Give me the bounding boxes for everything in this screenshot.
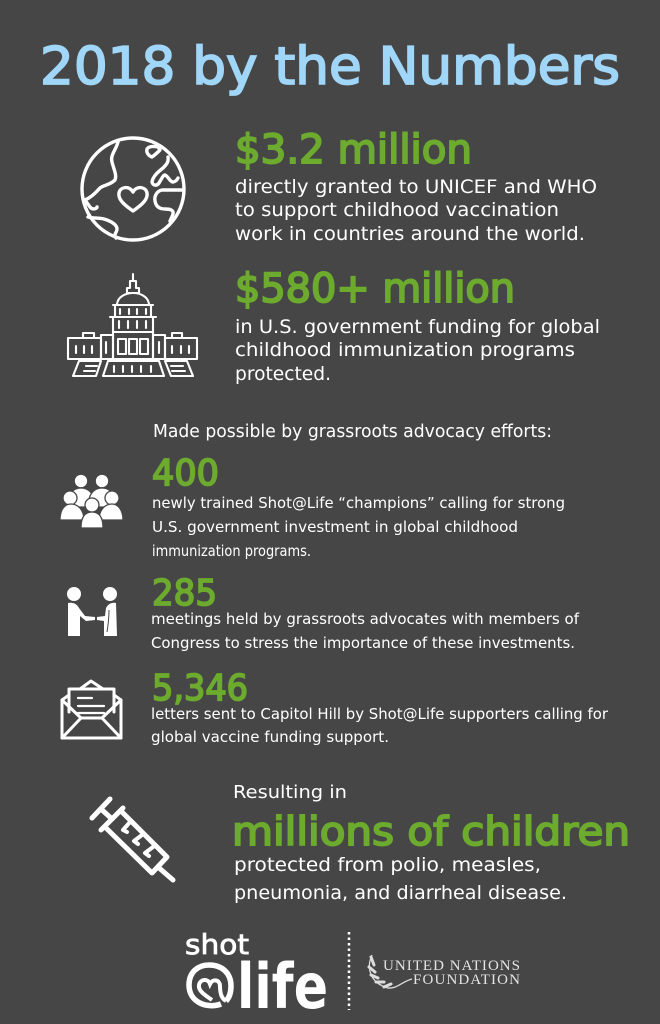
text: grant description: to support childhood vaccination (235, 199, 559, 221)
logo: United Nations Foundation: UNITED NATIONS (383, 958, 520, 974)
panel: champions stat (60, 453, 565, 560)
icon: capitol building (68, 274, 197, 376)
panel: result (92, 782, 630, 904)
icon: globe with heart (82, 138, 184, 240)
text: meetings description: Congress to stress the importance of these investments. (151, 634, 575, 652)
heading: $3.2 million: $3.2 million (235, 127, 472, 173)
text: letters description: letters sent to Capitol Hill by Shot@Life supporters calling for (151, 705, 609, 723)
text: champions description: U.S. government investment in global childhood (152, 518, 518, 536)
panel: government funding stat (68, 266, 600, 385)
subheading: grassroots: Made possible by grassroots advocacy efforts: (153, 422, 552, 442)
text: funding description: in U.S. government funding for global (235, 316, 600, 338)
logo: United Nations Foundation: FOUNDATION (413, 972, 520, 988)
text: letters description: global vaccine funding support. (151, 728, 389, 746)
text: meetings description: meetings held by grassroots advocates with members of (151, 610, 580, 628)
logo: shot at life: shot (185, 928, 249, 961)
text: funding description: protected. (235, 363, 331, 385)
text: result description (234, 854, 567, 904)
title: 2018 by the Numbers (40, 37, 620, 97)
panel: letters stat (62, 668, 609, 746)
number: 400: 400 (152, 453, 219, 494)
number: 5,346: 5,346 (152, 668, 248, 709)
logo: shot at life: life (237, 950, 328, 1023)
logo: United Nations Foundation (369, 955, 520, 988)
icon: group of people (60, 474, 123, 528)
text: resulting in: Resulting in (233, 782, 347, 803)
heading: millions of children: millions of children (232, 810, 630, 855)
text: grant description (235, 176, 597, 245)
panel: grant stat (82, 127, 597, 245)
logos (185, 928, 520, 1023)
panel: meetings stat (67, 573, 580, 652)
text: champions description (152, 494, 565, 560)
text: funding description (235, 316, 600, 385)
text: meetings description (151, 610, 580, 652)
text: champions description: newly trained Shot@Life “champions” calling for strong (152, 494, 565, 512)
heading: $580+ million: $580+ million (235, 266, 515, 312)
icon: open envelope with letter (62, 681, 121, 738)
text: grant description: directly granted to UNICEF and WHO (235, 176, 597, 198)
logo: shot at life (185, 928, 328, 1023)
text: funding description: childhood immunization programs (235, 339, 575, 361)
icon: syringe (92, 799, 173, 880)
text: grant description: work in countries around the world. (235, 223, 585, 245)
dotted divider (348, 932, 350, 1010)
text: result description: protected from polio, measles, (234, 854, 541, 876)
icon: handshake (67, 587, 117, 636)
text: champions description: immunization programs. (152, 542, 311, 560)
text: letters description (151, 705, 609, 746)
text: result description: pneumonia, and diarrheal disease. (234, 882, 567, 904)
number: 285: 285 (152, 573, 217, 614)
